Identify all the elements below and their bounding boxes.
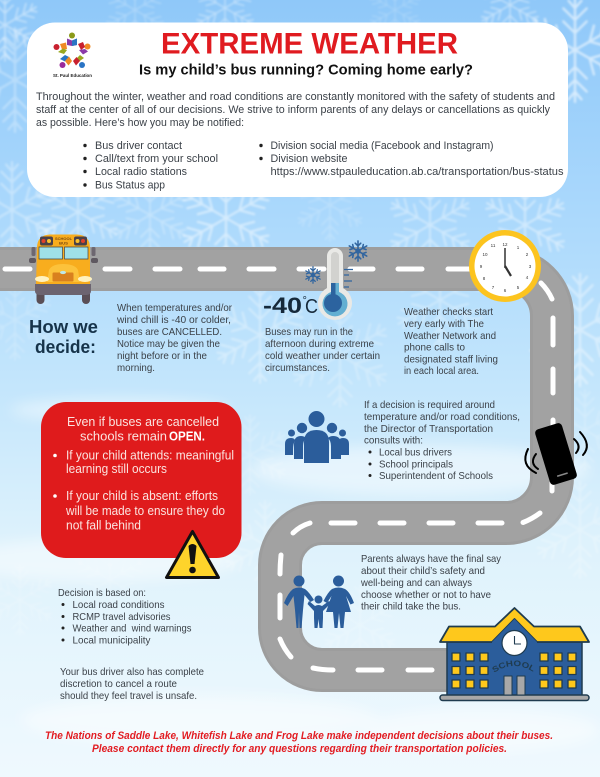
text: driver discretion: should they feel travel is unsafe. (60, 690, 197, 702)
icon: ringing phone (525, 422, 587, 486)
text: decision factors (58, 587, 192, 646)
text: afternoon buses: circumstances. (265, 362, 330, 374)
text: minus forty degrees: C (305, 296, 318, 318)
text: parents final say (360, 553, 502, 612)
title: EXTREME WEATHER (161, 28, 458, 60)
text: director consults: Local bus drivers (379, 446, 452, 458)
icon: clock: 2 (526, 252, 529, 257)
icon: clock: 9 (480, 264, 483, 269)
footer note: Please contact them directly for any questions regarding their transportation policies. (92, 743, 507, 755)
icon: group of people (285, 411, 349, 463)
text: director consults: the Director of Transportation (364, 423, 493, 435)
icon: school bus (29, 234, 98, 304)
text: decision factors: Decision is based on: (58, 587, 146, 599)
notification list: left: Bus Status app (95, 180, 165, 192)
text: cancellation rule: When temperatures and/or (117, 302, 232, 314)
text: afternoon buses: Buses may run in the (265, 326, 353, 338)
icon: school building (439, 607, 590, 702)
text: decision factors: RCMP travel advisories (72, 611, 170, 623)
callout: schools remain open: not fall behind (66, 518, 141, 532)
text: driver discretion (60, 666, 204, 702)
icon: thermometer with snowflakes (306, 241, 367, 320)
callout: schools remain open: If your child attends: meaningful (66, 448, 234, 462)
text: afternoon buses (265, 326, 380, 374)
notification list: right: https://www.stpauleducation.ab.ca/transportation/bus-status (270, 166, 564, 178)
header panel (27, 22, 568, 197)
footer note: The Nations of Saddle Lake, Whitefish Lake and Frog Lake make independent decisions about their buses. (45, 730, 553, 742)
text: minus forty degrees (263, 293, 318, 318)
subtitle: Is my child’s bus running? Coming home early? (139, 62, 473, 78)
notification list: right (259, 140, 564, 178)
winding road (0, 269, 553, 670)
icon: clock: 3 (529, 264, 532, 269)
text: cancellation rule: Notice may be given the (117, 338, 220, 350)
heading: how we decide: decide: (35, 336, 96, 357)
icon: clock: 12 (502, 242, 508, 247)
text: driver discretion: Your bus driver also has complete (60, 666, 204, 678)
text: weather checks: very early with The (404, 318, 484, 330)
text: cancellation rule (116, 302, 232, 374)
callout: schools remain open (41, 402, 242, 558)
text: cancellation rule: wind chill is -40 or colder, (116, 314, 231, 326)
callout: schools remain open: OPEN. (169, 430, 205, 444)
text: minus forty degrees: ° (302, 295, 307, 307)
text: director consults: consults with: (364, 434, 423, 446)
notification list: right: Division website (270, 153, 348, 165)
notification list: left (83, 140, 218, 192)
intro paragraph: as possible. Here’s how you may be notified: (36, 117, 244, 129)
text: director consults: If a decision is required around (364, 399, 495, 411)
text: director consults: temperature and/or road conditions, (364, 411, 520, 423)
icon: clock: 7 (492, 285, 495, 290)
icon: clock: 10 (482, 252, 488, 257)
text: decision factors: Weather and wind warnings (72, 622, 192, 634)
text: weather checks: Weather Network and (404, 330, 496, 342)
text: parents final say: their child take the bus. (361, 600, 461, 612)
text: weather checks: phone calls to (404, 342, 465, 354)
text: director consults: School principals (379, 458, 453, 470)
text: afternoon buses: afternoon during extreme (265, 338, 374, 350)
text: cancellation rule: morning. (117, 362, 155, 374)
text: afternoon buses: cold weather under certain (265, 350, 380, 362)
text: weather checks (404, 306, 498, 377)
text: cancellation rule: night before or in the (117, 350, 207, 362)
text: weather checks: Weather checks start (404, 306, 493, 318)
notification list: right: Division social media (Facebook and Instagram) (270, 140, 494, 152)
text: weather checks: designated staff living (404, 354, 498, 366)
text: cancellation rule: buses are CANCELLED. (117, 326, 222, 338)
callout: schools remain open: If your child is absent: efforts (66, 489, 218, 503)
text: parents final say: well-being and can always (360, 577, 472, 589)
icon: school bus: SCHOOL (55, 237, 72, 241)
icon: family (284, 576, 354, 628)
icon: warning triangle (166, 532, 218, 578)
notification list: left: Bus driver contact (95, 140, 183, 152)
notification list: left: Local radio stations (95, 166, 187, 178)
text: driver discretion: discretion to cancel a route (60, 678, 177, 690)
heading: how we decide: How we (29, 316, 98, 337)
text: decision factors: Local municipality (72, 634, 151, 646)
intro paragraph: Throughout the winter, weather and road conditions are constantly monitored with the safety of students and (36, 91, 555, 103)
intro paragraph: staff at the center of all of our decisions. We strive to inform parents of any delays or cancellations as quickly (36, 104, 550, 116)
icon: clock: 5 (517, 285, 520, 290)
callout: schools remain open: schools remain (80, 430, 167, 444)
callout: schools remain open: will be made to ensure they do (65, 504, 225, 518)
icon: clock: 6 (504, 288, 507, 293)
heading: how we decide (29, 316, 98, 357)
background: snow drifts (0, 398, 600, 752)
icon: clock: 8 (483, 276, 486, 281)
callout: schools remain open: Even if buses are cancelled (67, 415, 219, 429)
text: weather checks: in each local area. (404, 365, 479, 377)
icon: clock (469, 230, 541, 302)
icon: clock: 4 (526, 275, 529, 280)
text: parents final say: choose whether or not to have (361, 589, 491, 601)
footer note (45, 730, 553, 755)
logo: St. Paul Education: St. Paul Education (53, 73, 92, 79)
intro paragraph (36, 91, 555, 129)
text: parents final say: about their child’s safety and (361, 565, 485, 577)
icon: school bus: BUS (59, 242, 68, 246)
notification list: left: Call/text from your school (95, 153, 218, 165)
text: director consults (364, 399, 520, 482)
icon: clock: 11 (491, 243, 496, 248)
callout: schools remain open: learning still occurs (66, 462, 167, 476)
text: decision factors: Local road conditions (72, 599, 164, 611)
icon: clock: 1 (517, 245, 520, 250)
text: director consults: Superintendent of Schools (379, 470, 493, 482)
text: parents final say: Parents always have the final say (361, 553, 502, 565)
icon: school building: SCHOOL (492, 660, 534, 672)
text: minus forty degrees: -40 (263, 293, 302, 318)
logo: St. Paul Education (53, 32, 92, 79)
